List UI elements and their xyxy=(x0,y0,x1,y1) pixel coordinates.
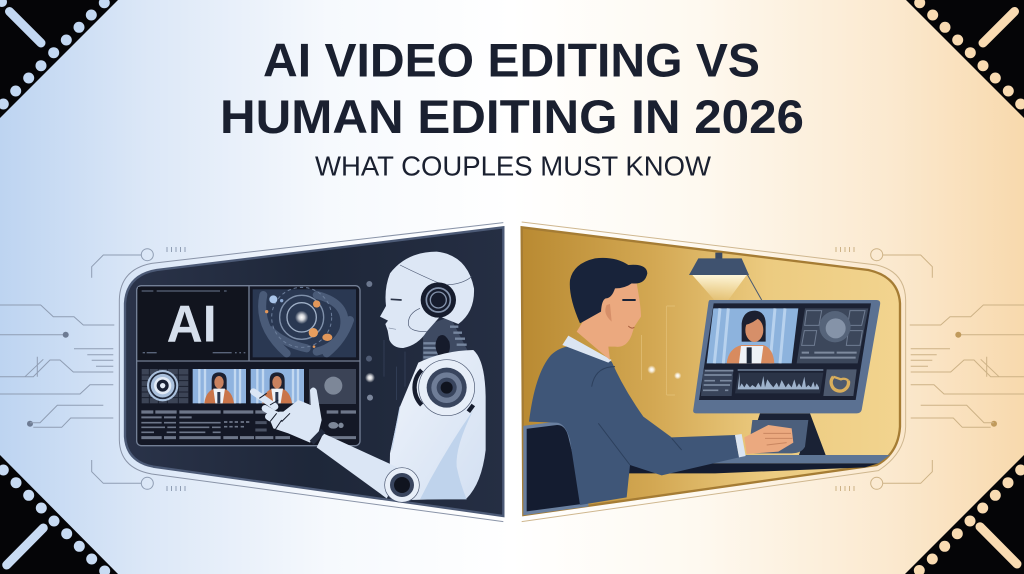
robot head xyxy=(380,252,474,348)
panel: AI editing xyxy=(119,223,503,522)
robot xyxy=(253,252,486,502)
hair xyxy=(570,258,647,323)
robot elbow xyxy=(385,468,419,502)
video thumbnail 2 xyxy=(251,369,304,403)
shirt collar xyxy=(562,336,612,363)
refresh dial xyxy=(823,369,857,396)
glow dots xyxy=(365,281,405,401)
circuit lines: left xyxy=(0,247,185,491)
robot forearm xyxy=(317,433,403,498)
panel: human editing xyxy=(522,222,906,522)
video frame xyxy=(707,308,798,363)
title xyxy=(220,34,804,143)
waveform timeline xyxy=(701,369,823,396)
title: HUMAN EDITING IN 2026 xyxy=(220,90,804,143)
hand xyxy=(744,425,793,454)
concentric dial xyxy=(142,369,188,403)
editing screen xyxy=(137,286,360,446)
neural visual xyxy=(253,287,356,357)
film strip: bottom left corner xyxy=(0,455,118,574)
preview tile xyxy=(309,369,356,404)
robot torso xyxy=(389,350,486,500)
robot neck xyxy=(423,317,467,362)
desk xyxy=(628,455,890,473)
film strip: top right corner xyxy=(906,0,1024,118)
robot ear xyxy=(421,282,456,318)
chair xyxy=(525,423,587,513)
AI label: AI xyxy=(167,295,217,353)
robot hand xyxy=(253,387,323,443)
title: AI VIDEO EDITING VS xyxy=(263,34,760,86)
cuff xyxy=(735,434,746,457)
control panel xyxy=(797,308,868,363)
film strip: top left corner xyxy=(0,0,118,118)
neck and face xyxy=(577,283,641,360)
jacket xyxy=(529,346,739,505)
subtitle: WHAT COUPLES MUST KNOW xyxy=(315,150,712,182)
lamp xyxy=(689,253,762,300)
circuit lines: right xyxy=(836,247,1024,491)
monitor stand xyxy=(752,413,826,455)
video thumbnail 1 xyxy=(193,369,246,403)
human editor xyxy=(525,258,793,513)
robot shoulder joint xyxy=(415,360,475,416)
timeline rows xyxy=(141,412,356,438)
monitor xyxy=(693,300,880,455)
film strip: bottom right corner xyxy=(905,455,1024,574)
